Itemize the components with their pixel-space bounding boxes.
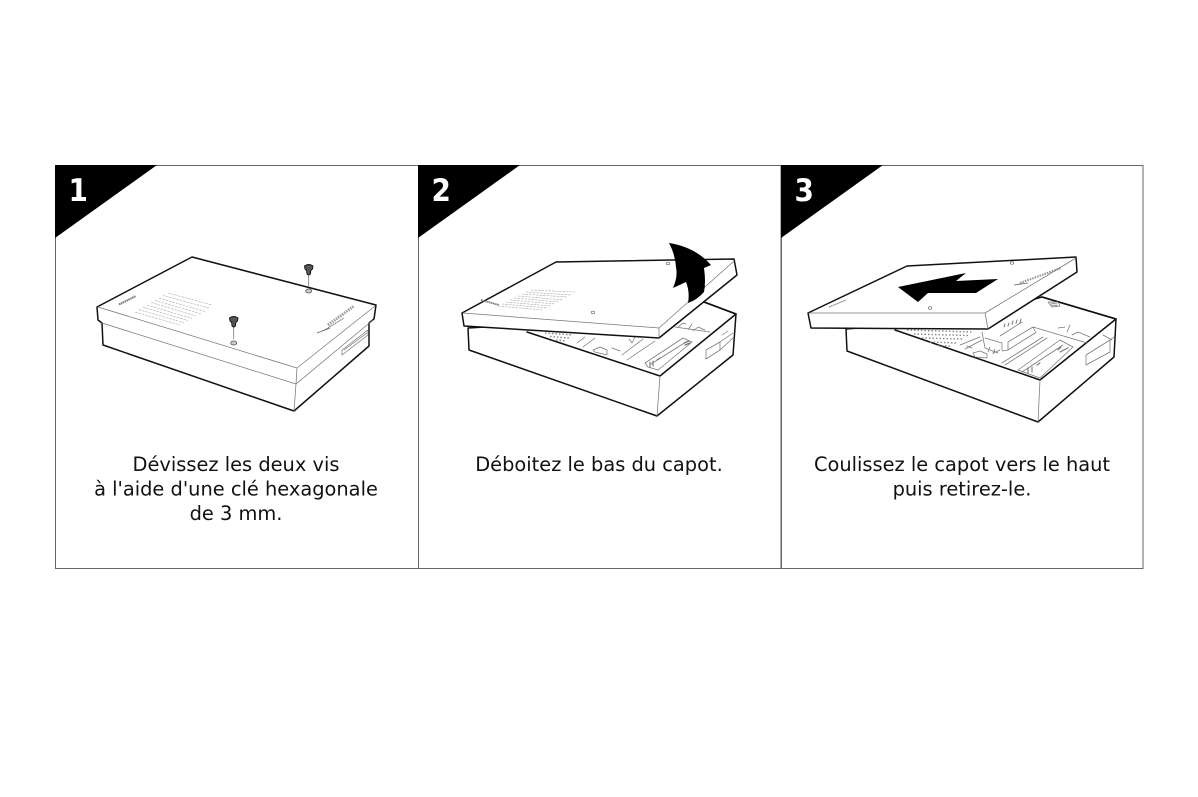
step badge 1 bbox=[55, 165, 157, 238]
instruction 3: Coulissez le capot vers le haut bbox=[814, 453, 1110, 476]
illustration: lid unclipped bbox=[462, 243, 737, 416]
step badge 3 bbox=[781, 165, 883, 238]
instruction 1: Dévissez les deux vis bbox=[133, 453, 339, 476]
step badge 3: 3 bbox=[794, 173, 814, 209]
lid bbox=[808, 257, 1077, 329]
screw left bbox=[230, 316, 238, 345]
instruction 2: Déboitez le bas du capot. bbox=[475, 453, 723, 476]
side port bbox=[1086, 335, 1114, 365]
illustration: lid sliding bbox=[808, 257, 1116, 422]
brand mark left bbox=[829, 300, 846, 307]
open case bbox=[846, 297, 1116, 422]
step badge 2 bbox=[418, 165, 520, 238]
vent grid bbox=[498, 290, 575, 310]
side port bbox=[706, 331, 733, 359]
screw holes bbox=[928, 307, 932, 309]
instruction 3: puis retirez-le. bbox=[893, 478, 1031, 500]
circuit board details bbox=[907, 330, 972, 346]
instruction 1: de 3 mm. bbox=[190, 502, 282, 525]
arrow: slide up bbox=[898, 273, 998, 302]
screw holes bbox=[591, 311, 595, 314]
step badge 1: 1 bbox=[68, 173, 88, 209]
vent grid bbox=[135, 293, 212, 325]
illustration: closed case with screws bbox=[97, 257, 376, 411]
panel 3: slide bbox=[781, 165, 1143, 568]
brand mark bbox=[481, 300, 499, 305]
brand mark right bbox=[317, 306, 354, 333]
circuit board details bbox=[545, 333, 573, 341]
side port bbox=[342, 330, 368, 355]
lid bbox=[462, 259, 737, 338]
brand mark right bbox=[1014, 268, 1061, 285]
open case bbox=[468, 302, 736, 416]
panel 1: unscrew bbox=[55, 165, 418, 568]
brand mark left bbox=[119, 296, 136, 304]
arrow: lift up bbox=[669, 243, 711, 303]
instruction 1: à l'aide d'une clé hexagonale bbox=[94, 478, 378, 500]
step badge 2: 2 bbox=[432, 173, 451, 209]
panel 2: unclip bbox=[418, 165, 781, 568]
screw right bbox=[304, 264, 313, 293]
